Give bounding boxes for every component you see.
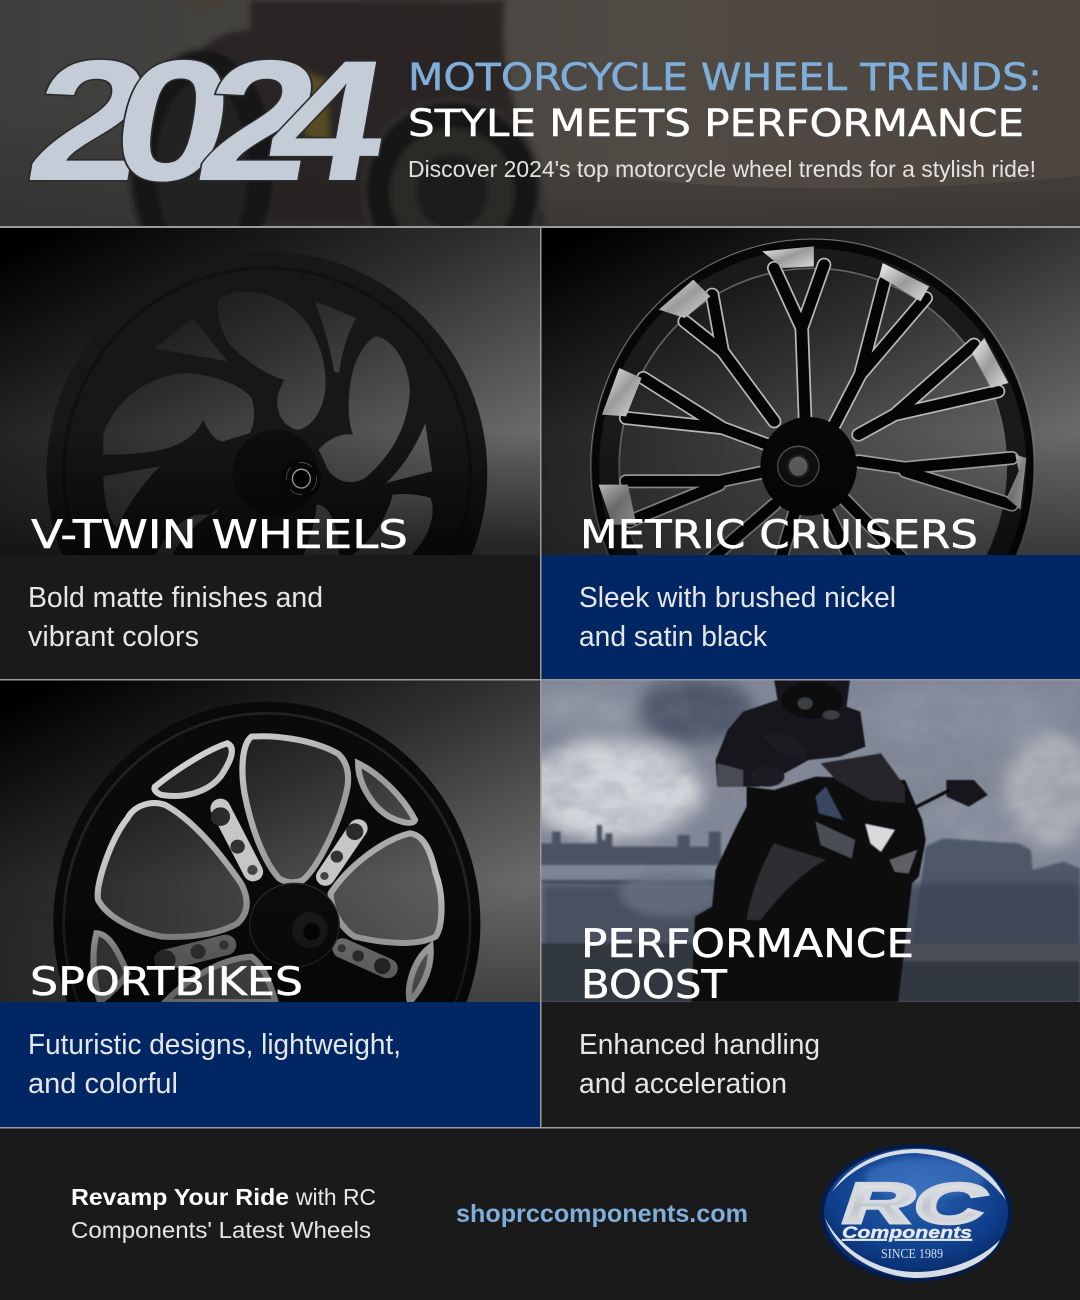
- caption text: Bold matte finishes and: [28, 582, 323, 614]
- heading: Performance Boost: BOOST: [581, 963, 727, 1008]
- panel image background: [0, 680, 540, 1002]
- caption text: and colorful: [28, 1068, 178, 1100]
- call to action: Components' Latest Wheels: [71, 1217, 371, 1243]
- website link: shoprccomponents.com: [456, 1200, 748, 1228]
- big year numeral: 2: [186, 26, 333, 217]
- panel image background: [0, 228, 540, 555]
- panel: Performance Boost: [516, 677, 1080, 1127]
- panel: footer: [0, 1128, 1080, 1300]
- caption text: and satin black: [579, 621, 767, 653]
- caption text: vibrant colors: [28, 621, 199, 653]
- wheel: matte black V-twin: [46, 254, 488, 555]
- photo: rider in smoke: [542, 680, 1080, 1002]
- caption box: [541, 1002, 1080, 1127]
- big year numeral: 0: [100, 26, 246, 217]
- heading line 1: MOTORCYCLE WHEEL TRENDS:: [408, 56, 1042, 99]
- distant hills: [0, 168, 1080, 226]
- skyline left: [540, 825, 726, 887]
- wheel: chrome sportbike: [54, 702, 480, 1002]
- panel: header: [0, 0, 1080, 226]
- panel: Metric Cruisers: [541, 228, 1080, 694]
- big year numeral: 4: [256, 26, 402, 217]
- smoke texture: [540, 680, 1080, 887]
- header background photo tone: [0, 0, 1080, 226]
- panel: V-Twin Wheels: [0, 228, 540, 679]
- call to action: Revamp Your Ride: [71, 1184, 289, 1210]
- skyline right: [912, 838, 1080, 947]
- caption text: Enhanced handling: [579, 1029, 820, 1061]
- caption text: and acceleration: [579, 1068, 787, 1100]
- heading: Metric Cruisers: METRIC CRUISERS: [580, 513, 978, 558]
- logo: RC Components: SINCE 1989: [881, 1246, 943, 1261]
- slots: [155, 807, 391, 974]
- wheel: brushed nickel spokes: [590, 238, 1036, 555]
- big year numeral: 2: [16, 26, 163, 217]
- panel image background: [541, 228, 1080, 555]
- subtitle: Discover 2024's top motorcycle wheel trends for a stylish ride!: [408, 156, 1036, 182]
- rider and motorcycle silhouette: [692, 680, 988, 1002]
- heading: Performance Boost: PERFORMANCE: [581, 922, 914, 967]
- caption text: Futuristic designs, lightweight,: [28, 1029, 401, 1061]
- heading line 2: STYLE MEETS PERFORMANCE: [408, 102, 1024, 145]
- caption box: [541, 555, 1080, 679]
- caption box: [0, 1002, 540, 1127]
- logo: RC Components: RC: [843, 1172, 986, 1236]
- heading: V-Twin Wheels: V-TWIN WHEELS: [31, 513, 408, 558]
- logo: RC Components: [820, 1144, 1012, 1282]
- logo: RC Components: Components: [842, 1223, 972, 1242]
- caption text: Sleek with brushed nickel: [579, 582, 896, 614]
- call to action: with RC: [295, 1184, 376, 1210]
- photo: motorcycle silhouette: [128, 0, 546, 226]
- footer background: [0, 1128, 1080, 1300]
- panel: Sportbikes: [0, 680, 540, 1133]
- heading: Sportbikes: SPORTBIKES: [30, 960, 303, 1005]
- caption box: [0, 555, 540, 679]
